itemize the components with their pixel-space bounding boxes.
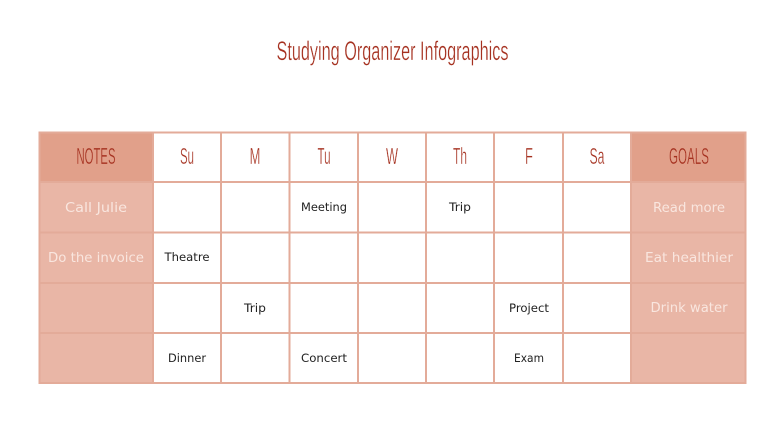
- weekday headers: W: [386, 143, 398, 169]
- calendar entries: Concert: [301, 351, 347, 365]
- panel: notes column: NOTES: [76, 143, 116, 169]
- panel: notes column: Call Julie: [65, 200, 127, 216]
- weekday headers: Th: [453, 143, 467, 169]
- calendar entries: Trip: [243, 301, 266, 315]
- weekday headers: [180, 143, 605, 169]
- calendar entries: Meeting: [301, 200, 347, 214]
- weekday headers: Su: [180, 143, 194, 169]
- panel: goals column: Eat healthier: [645, 250, 733, 266]
- panel: notes column: Do the invoice: [48, 250, 144, 266]
- panel: goals column: [631, 132, 746, 383]
- panel: goals column: GOALS: [669, 143, 709, 169]
- calendar entries: [163, 200, 549, 365]
- panel: notes column: [39, 132, 153, 383]
- title: Studying Organizer Infographics: [276, 36, 508, 66]
- calendar entries: Dinner: [168, 351, 206, 365]
- calendar entries: Exam: [514, 351, 544, 365]
- panel: goals column: Drink water: [650, 300, 728, 316]
- weekday headers: Sa: [590, 143, 605, 169]
- panel: goals column: Read more: [653, 200, 725, 216]
- grid lines: [39, 132, 746, 383]
- weekday headers: F: [525, 143, 533, 169]
- calendar entries: Project: [509, 301, 549, 315]
- weekday headers: Tu: [318, 143, 330, 169]
- weekday headers: M: [250, 143, 260, 169]
- calendar entries: Theatre: [163, 250, 210, 264]
- organizer table: [39, 132, 746, 383]
- calendar entries: Trip: [448, 200, 471, 214]
